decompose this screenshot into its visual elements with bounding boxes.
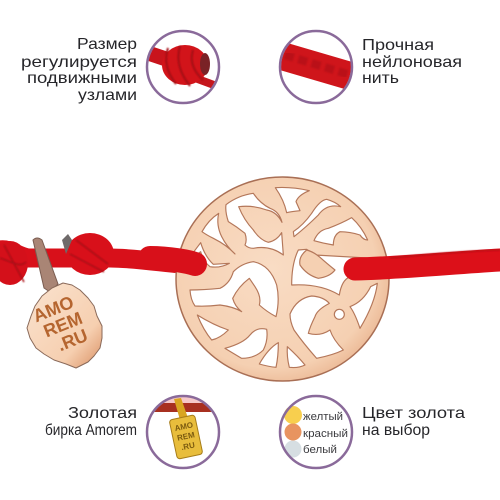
icon: gold colour swatches: белый	[303, 444, 337, 456]
callout: gold colour choice text: Цвет золота	[362, 405, 465, 422]
rope: left end through disc	[150, 258, 195, 264]
callout: gold tag text: Золотая	[68, 405, 137, 422]
icon: knot close-up	[145, 31, 222, 103]
icon: nylon thread close-up	[275, 31, 357, 103]
callout: gold tag text: бирка Amorem	[45, 422, 137, 439]
icon: gold colour swatches	[280, 396, 352, 468]
logo tag: Amorem leaf pendant: REM	[41, 308, 85, 341]
callout: gold colour choice text: на выбор	[362, 422, 430, 439]
logo tag: Amorem leaf pendant: .RU	[54, 325, 91, 355]
logo tag: Amorem leaf pendant	[27, 238, 102, 368]
callout: adjustable knots text	[21, 36, 137, 104]
logo tag: Amorem leaf pendant: AMO	[30, 292, 77, 326]
callout: strong nylon thread text: Прочная	[362, 37, 434, 54]
callout: adjustable knots text: подвижными	[27, 70, 137, 87]
icon: gold colour swatches: желтый	[303, 411, 343, 423]
icon: gold tag close-up: REM	[176, 430, 196, 443]
icon: gold tag close-up: AMO	[174, 420, 194, 433]
callout: adjustable knots text: Размер	[77, 36, 137, 53]
rope: left strand behind pendant	[0, 233, 198, 285]
icon: gold colour swatches: красный	[303, 428, 348, 440]
callout: strong nylon thread text: нейлоновая	[362, 54, 462, 71]
pendant: tree of life disc	[176, 177, 389, 381]
rope: right strand through disc	[355, 250, 500, 269]
callout: gold tag text	[45, 405, 137, 439]
callout: strong nylon thread text: нить	[362, 70, 399, 87]
callout: adjustable knots text: узлами	[78, 87, 137, 104]
callout: strong nylon thread text	[362, 37, 462, 87]
icon: gold tag close-up: .RU	[180, 440, 196, 452]
callout: gold colour choice text	[362, 405, 465, 439]
icon: gold tag close-up	[145, 396, 221, 468]
callout: adjustable knots text: регулируется	[21, 54, 137, 71]
